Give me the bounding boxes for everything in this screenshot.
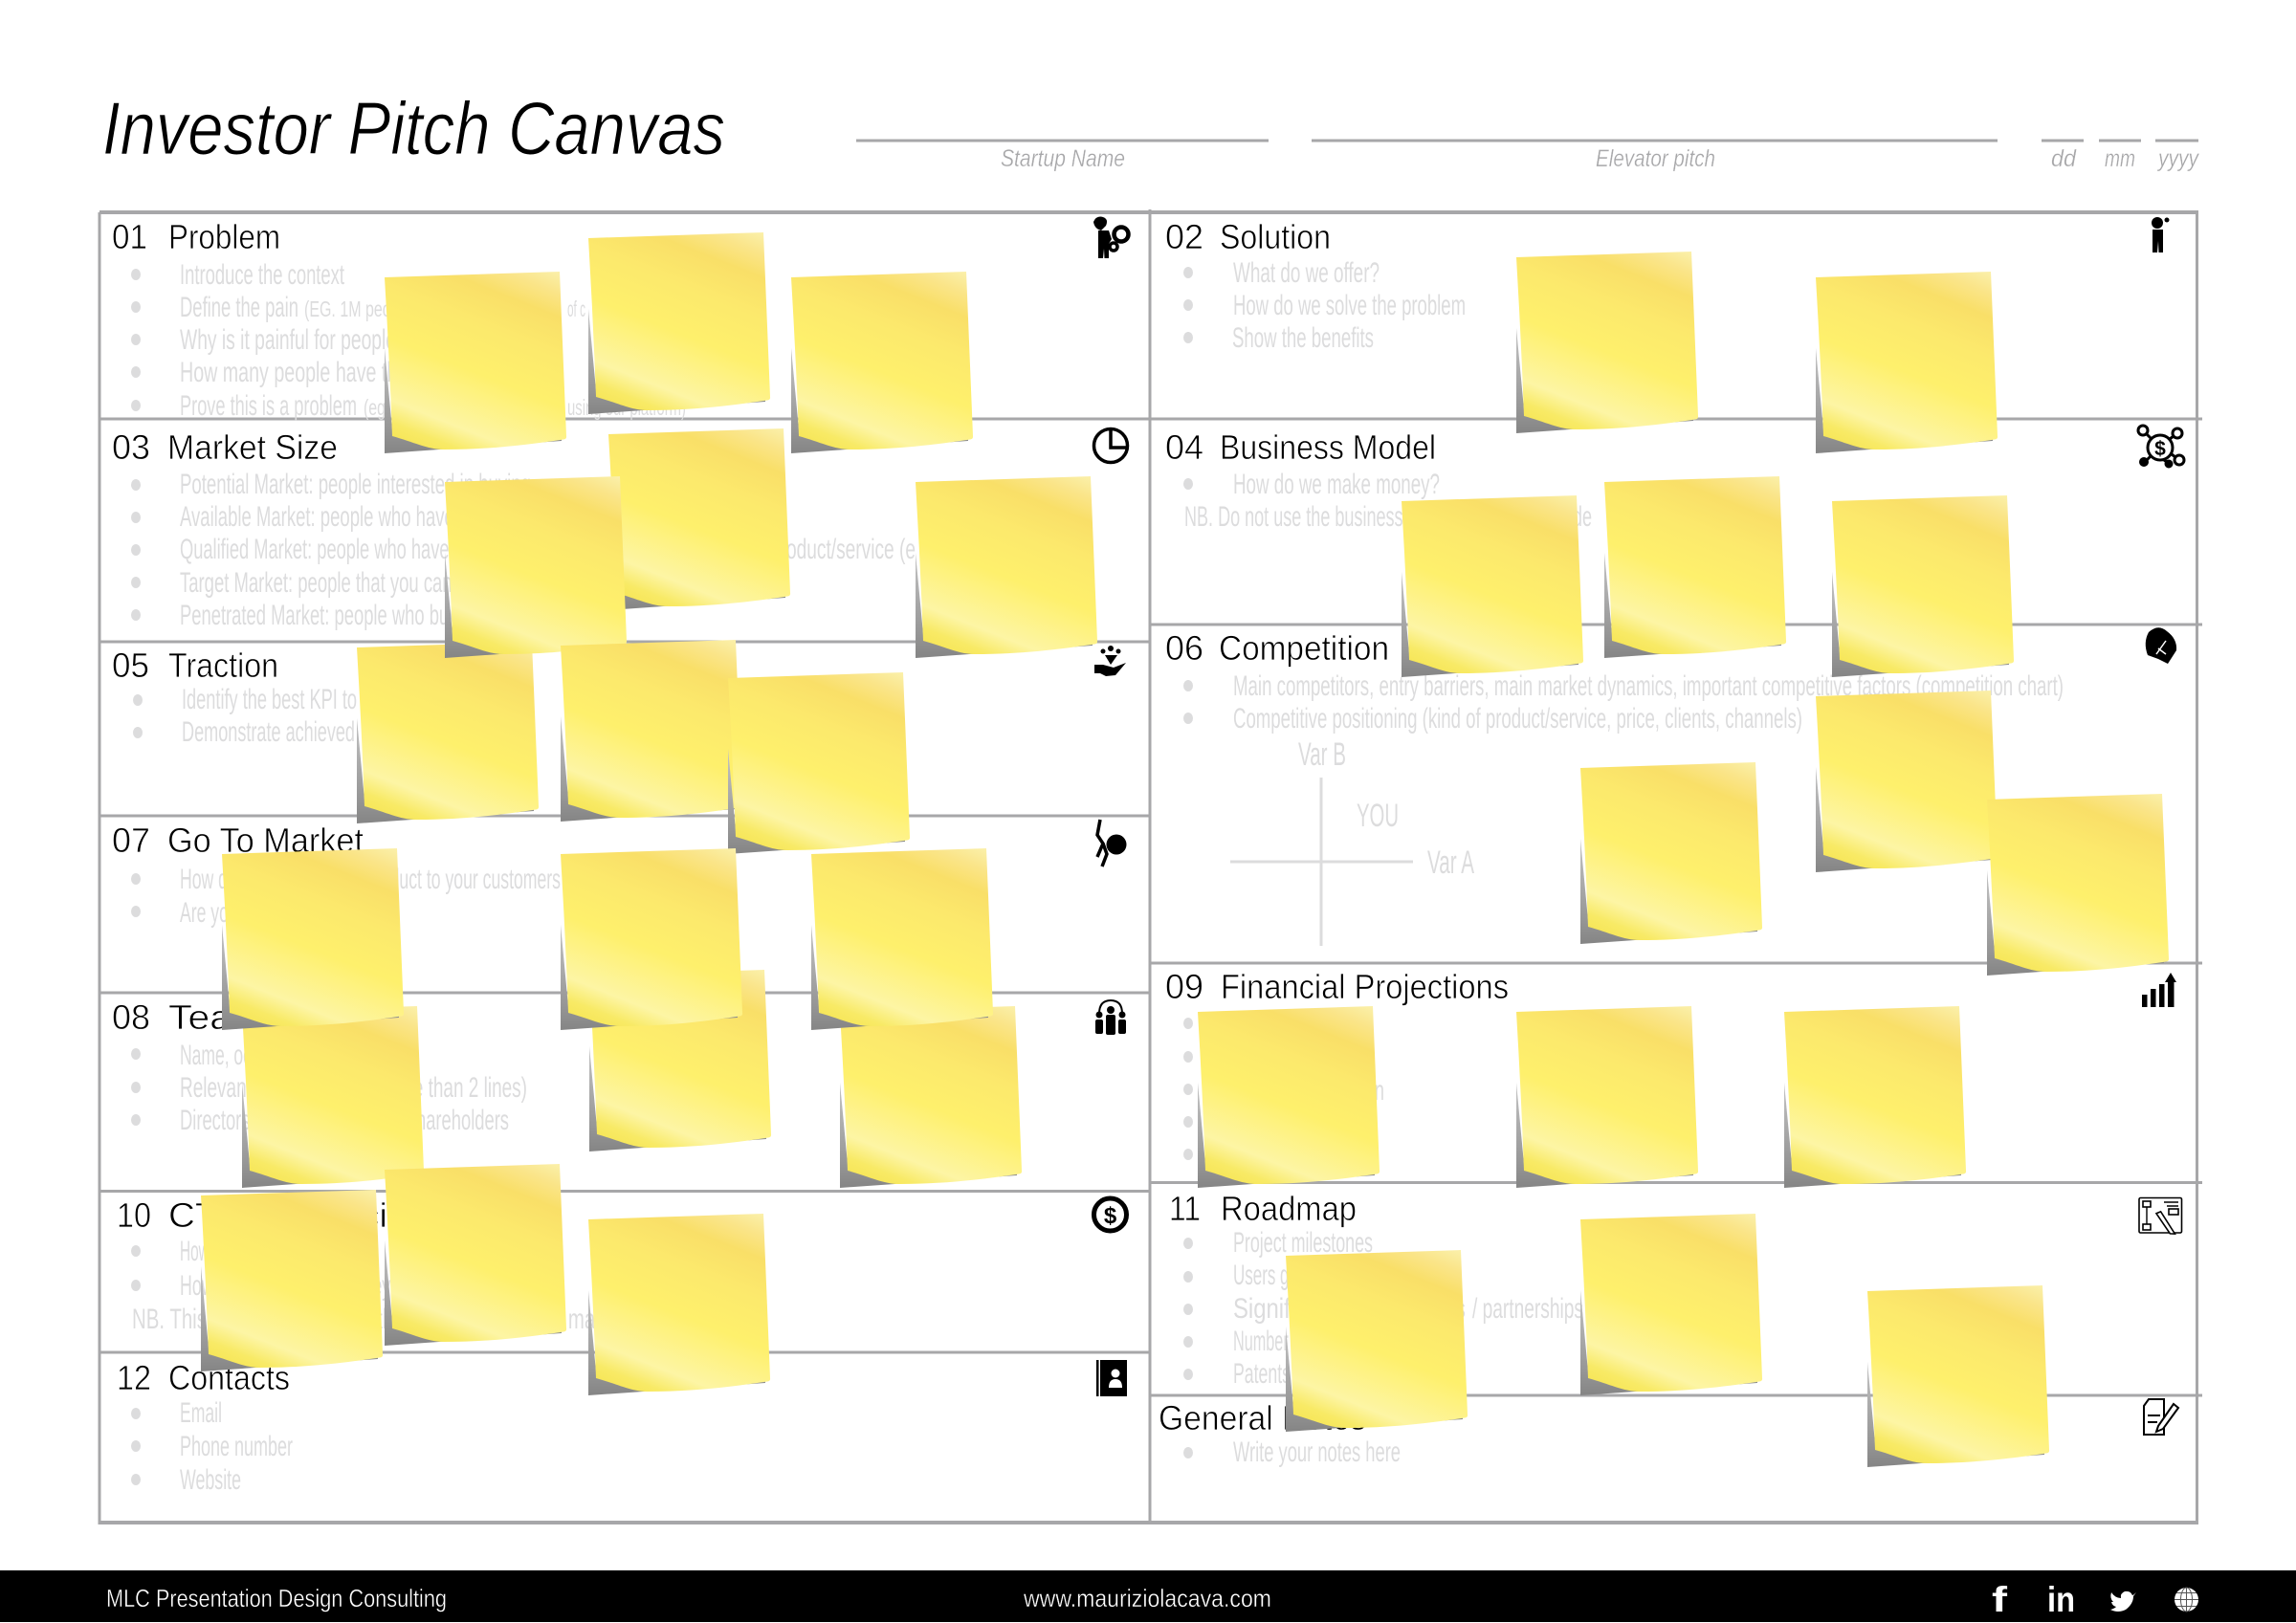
heading: 09 Financial Projections: Financial Projections (1221, 967, 1509, 1006)
heading: 07 Go To Market: Go To Market (167, 821, 364, 860)
heading: 12 Contacts: 12 (117, 1358, 151, 1397)
header field: date: dd (2051, 145, 2077, 172)
heading: 11 Roadmap: Roadmap (1221, 1189, 1357, 1228)
bullet list: contacts: Phone number (180, 1431, 293, 1462)
header field: elevator pitch: Elevator pitch (1596, 145, 1715, 172)
icon: hand holding growth (1094, 646, 1126, 676)
sticky note (1516, 1006, 1698, 1188)
sticky note (1286, 1250, 1468, 1432)
sticky note (561, 640, 742, 822)
panel: 12 Contacts (117, 1358, 1127, 1496)
bullet list: problem: Introduce the context (180, 259, 344, 291)
bullet list: general notes: Write your notes here (1233, 1437, 1401, 1468)
bullet list: problem: How many people have this problem (180, 357, 484, 388)
header field: startup name: Startup Name (1001, 145, 1125, 172)
bullet list: contacts: Website (180, 1464, 241, 1496)
bullet list: CTA: How will you use the money? (180, 1270, 400, 1302)
bullet list: team: Name, occupation, role (180, 1040, 352, 1071)
icon: money network (2138, 426, 2184, 467)
heading: 08 Team (112, 998, 264, 1037)
panel: 06 Competition (1165, 627, 2176, 946)
heading: 10 CTA: 10 (117, 1195, 151, 1235)
bullet list: problem: Define the pain (180, 292, 298, 323)
sticky note (589, 970, 771, 1151)
heading: 04 Business Model: 04 (1165, 428, 1203, 467)
heading: 05 Traction: 05 (112, 646, 149, 685)
bullet list: market size: Potential Market: people interested in buying (180, 469, 531, 500)
icon: twitter (2110, 1591, 2136, 1612)
panel: 01 Problem (112, 217, 1129, 422)
icon: rising bar chart (2142, 973, 2176, 1007)
heading: 11 Roadmap (1169, 1189, 1357, 1228)
bullet list: market size: Qualified Market: people who have the money (180, 534, 536, 565)
bullet list: roadmap: Project milestones (1233, 1227, 1373, 1259)
footer text: website: www.mauriziolacava.com (1023, 1584, 1271, 1612)
heading: 05 Traction: Traction (168, 646, 278, 685)
icon: address book (1096, 1360, 1127, 1396)
heading: General Notes: General Notes (1159, 1398, 1366, 1437)
sticky note (385, 272, 566, 453)
header field: date (2042, 141, 2199, 172)
panel: 02 Solution (1165, 217, 2170, 354)
sticky note (1580, 762, 1762, 944)
heading: 06 Competition: 06 (1165, 628, 1203, 668)
bullet list: roadmap: Patents (1233, 1358, 1291, 1390)
bullet list: solution (1183, 257, 1466, 354)
bullet list: problem: (EG. 1M people (304, 296, 411, 321)
heading: 03 Market Size: Market Size (167, 428, 338, 467)
sticky note (916, 476, 1097, 658)
sticky note (728, 672, 910, 854)
bullet list: traction (133, 684, 357, 748)
bullet list: roadmap: Number of users (1233, 1326, 1348, 1357)
icon: figure pushing ball (1097, 820, 1127, 866)
chart: competitive positioning quadrant: YOU (1357, 798, 1399, 834)
heading: 09 Financial Projections: 09 (1165, 967, 1203, 1006)
sticky note (1604, 476, 1786, 658)
bullet list: solution: Show the benefits (1232, 322, 1374, 354)
heading: 03 Market Size: 03 (112, 428, 150, 467)
bullet list: traction: Demonstrate achieved (182, 716, 355, 748)
sticky note (385, 1164, 566, 1346)
heading: 04 Business Model: Business Model (1220, 428, 1436, 467)
heading: 01 Problem: Problem (168, 217, 280, 256)
panel: 03 Market Size (112, 428, 1128, 631)
bullet list: financial projections (1183, 1018, 1384, 1160)
icon: dollar coin (1094, 1198, 1127, 1231)
heading: 12 Contacts (117, 1358, 290, 1397)
sticky note (840, 1006, 1022, 1188)
bullet list: market size: product/service (e (770, 534, 916, 565)
heading: 05 Traction (112, 646, 278, 685)
heading: 12 Contacts: Contacts (168, 1358, 290, 1397)
sticky note (242, 1006, 424, 1188)
sticky note (222, 848, 404, 1030)
heading: 01 Problem (112, 217, 280, 256)
footer bar (0, 1570, 2296, 1622)
sticky note (608, 428, 790, 610)
sticky note (357, 642, 539, 823)
icon: pie chart clock (1094, 428, 1128, 463)
bullet list: team: Directors, advisors and main shareholders (180, 1105, 509, 1136)
bullet list: competition (1183, 670, 2064, 735)
header field: date: yyyy (2156, 145, 2199, 172)
icon: linkedin: in (2047, 1580, 2075, 1619)
title: Investor Pitch Canvas (102, 86, 725, 170)
heading: 02 Solution: 02 (1165, 217, 1203, 256)
bullet list: go to market (131, 864, 561, 929)
bullet list: general notes (1183, 1437, 1401, 1468)
bullet list: business model: NB. Do not use the business model canvas as a slide (1184, 501, 1592, 533)
sticky note (588, 232, 770, 414)
heading: 11 Roadmap: 11 (1169, 1189, 1201, 1228)
panel: 11 Roadmap (1169, 1189, 2181, 1390)
icon: roadmap plan with pencil (2139, 1197, 2181, 1235)
icon: team of people (1095, 1000, 1126, 1035)
icon: money network: $ (2154, 438, 2166, 460)
bullet list: traction: Identify the best KPI to (182, 684, 357, 715)
bullet list: go to market: Are you scalable? (180, 897, 314, 929)
sticky note (1198, 1006, 1380, 1188)
heading: 07 Go To Market: 07 (112, 821, 150, 860)
icon: dollar coin: $ (1104, 1203, 1117, 1229)
bullet list: market size: Target Market: people that you can reach (180, 567, 501, 599)
panel: 08 Team (112, 998, 1126, 1136)
sticky note (1816, 691, 1998, 872)
chart: competitive positioning quadrant: Var A (1427, 844, 1474, 881)
icon: person with gears (1093, 217, 1129, 258)
sticky note (1867, 1285, 2049, 1467)
bullet list: problem: using our platform) (567, 395, 686, 420)
bullet list: market size (131, 469, 916, 631)
bullet list: CTA: NB. This should be in line with the projections you made (132, 1304, 617, 1335)
bullet list: CTA (131, 1236, 617, 1335)
panel: 10 CTA (117, 1195, 1127, 1335)
sticky note (1516, 252, 1698, 433)
bullet list: CTA: How much do you need? (180, 1236, 342, 1267)
panel: 09 Financial Projections (1165, 967, 2176, 1160)
heading: 06 Competition: Competition (1219, 628, 1389, 668)
bullet list: business model (1183, 469, 1592, 533)
heading: 02 Solution (1165, 217, 1331, 256)
panel: 07 Go To Market (112, 820, 1127, 929)
bullet list: roadmap (1183, 1227, 1583, 1390)
bullet list: problem (131, 259, 686, 422)
heading: 08 Team: 08 (112, 998, 150, 1037)
sticky note (445, 476, 627, 658)
bullet list: go to market: How do you deliver your product to your customers (180, 864, 561, 895)
icon: person with light bulb (2152, 217, 2170, 252)
panel: 05 Traction (112, 646, 1126, 748)
bullet list: roadmap: Users growth (1233, 1260, 1329, 1291)
heading: 10 CTA: CTA / Financing (168, 1195, 429, 1235)
bullet list: team (131, 1040, 527, 1136)
footer text: company: MLC Presentation Design Consulting (106, 1584, 447, 1612)
bullet list: problem: of c (567, 296, 585, 321)
chart: competitive positioning quadrant (1230, 736, 1474, 946)
bullet list: competition: Competitive positioning (kind of product/service, price, clients, channels) (1233, 703, 1802, 735)
heading: 01 Problem: 01 (112, 217, 147, 256)
sticky note (811, 848, 993, 1030)
icon: boxing glove (2146, 627, 2176, 664)
bullet list: problem: (eg (364, 395, 386, 420)
chart: competitive positioning quadrant: Var B (1298, 736, 1346, 773)
icon: globe (2175, 1588, 2198, 1612)
panel: 04 Business Model (1165, 426, 2184, 533)
header field: date: mm (2105, 145, 2135, 172)
sticky note (1987, 794, 2169, 976)
sticky note (1832, 495, 2014, 677)
sticky note (1580, 1214, 1762, 1395)
bullet list: contacts (131, 1397, 293, 1496)
sticky note (1816, 272, 1998, 453)
bullet list: solution: What do we offer? (1233, 257, 1380, 289)
bullet list: problem: Prove this is a problem (180, 390, 357, 422)
sticky note (588, 1214, 770, 1395)
sticky note (201, 1190, 383, 1371)
icon: document with pencil (2144, 1399, 2178, 1435)
bullet list: problem: Why is it painful for people (180, 324, 396, 356)
bullet list: market size: Penetrated Market: people who buy from you (180, 600, 531, 631)
bullet list: business model: How do we make money? (1233, 469, 1440, 500)
bullet list: solution: How do we solve the problem (1233, 290, 1466, 321)
bullet list: market size: Available Market: people who have the need (180, 501, 528, 533)
panel: General Notes (1159, 1398, 2178, 1468)
bullet list: roadmap: / partnerships (1472, 1293, 1583, 1325)
bullet list: contacts: Email (180, 1397, 222, 1429)
bullet list: roadmap: Significant agreements (1233, 1293, 1466, 1325)
heading: 08 Team: Team (168, 998, 264, 1037)
sticky note (561, 848, 742, 1030)
icon: facebook: f (1992, 1580, 2008, 1619)
bullet list: team: Relevant experience (no more than 2 lines) (180, 1072, 527, 1104)
sticky note (1784, 1006, 1966, 1188)
sticky note (791, 272, 973, 453)
bullet list: financial projections: Revenue projection (1233, 1075, 1384, 1107)
sticky note (1402, 495, 1583, 677)
heading: 02 Solution: Solution (1220, 217, 1331, 256)
